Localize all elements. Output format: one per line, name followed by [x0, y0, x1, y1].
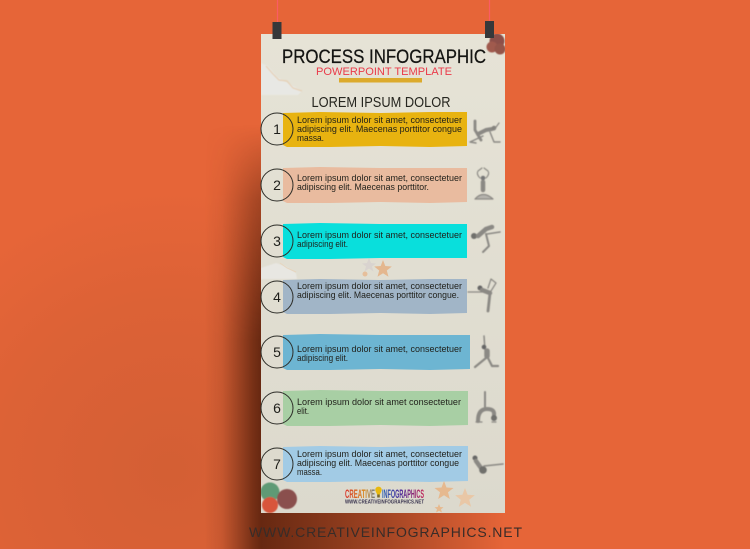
bar 3: [283, 223, 467, 259]
text: INFOGRAPHICS: [382, 487, 424, 501]
step 3: [261, 223, 500, 259]
decorative cloud top left: [261, 63, 302, 95]
step 2: [261, 167, 493, 203]
logo: CREATIVE: [345, 487, 375, 501]
text 7: Lorem ipsum dolor sit amet, consectetuer: [297, 449, 462, 460]
section heading: LOREM IPSUM DOLOR: [312, 95, 450, 111]
icon: yoga pose 3: [471, 227, 500, 252]
step 5: [261, 334, 498, 370]
text 3: Lorem ipsum dolor sit amet, consectetuer: [297, 230, 462, 241]
circle 3: 3: [273, 233, 281, 249]
bar 6: [283, 390, 468, 426]
text 2: adipiscing elit. Maecenas porttitor.: [297, 182, 429, 193]
text 4: Lorem ipsum dolor sit amet, consectetuer: [297, 281, 462, 292]
text 7: adipiscing elit. Maecenas porttitor congue: [297, 458, 459, 469]
text 4: [297, 281, 462, 301]
poster: [261, 34, 505, 513]
text 5: adipiscing elit.: [297, 353, 348, 364]
bar 1: [283, 112, 467, 147]
bar 7: [283, 446, 468, 482]
decorative leaves top right: [486, 34, 506, 54]
text 3: adipiscing elit.: [297, 239, 348, 250]
circle 4: 4: [273, 289, 281, 305]
circle 7: 7: [273, 456, 281, 472]
circle 5: [261, 336, 293, 368]
circle 5: 5: [273, 344, 281, 360]
circle 6: 6: [273, 400, 281, 416]
icon: yoga pose 2: [475, 168, 493, 199]
decorative stars middle: [362, 258, 392, 277]
icon: yoga pose 5: [475, 336, 498, 367]
text 1: [297, 115, 462, 144]
text 1: Lorem ipsum dolor sit amet, consectetuer: [297, 115, 462, 126]
circle 7: [261, 448, 293, 480]
text 7: [297, 449, 462, 478]
text 2: Lorem ipsum dolor sit amet, consectetuer: [297, 173, 462, 184]
bar 2: [283, 167, 467, 203]
text 4: adipiscing elit. Maecenas porttitor congue.: [297, 290, 459, 301]
underline bar: [339, 78, 422, 82]
text 5: Lorem ipsum dolor sit amet, consectetuer: [297, 344, 462, 355]
circle 3: [261, 225, 293, 257]
icon: yoga pose 4: [468, 279, 496, 311]
step 4: [261, 279, 496, 314]
circle 2: 2: [273, 177, 281, 193]
text 7: massa.: [297, 467, 322, 478]
subtitle: POWERPOINT TEMPLATE: [316, 66, 452, 78]
poster shadow: [0, 125, 505, 549]
logo: WWW.CREATIVEINFOGRAPHICS.NET: [345, 500, 424, 506]
hanging strings and clips: [272, 0, 494, 39]
circle 1: [261, 113, 293, 145]
text 1: adipiscing elit. Maecenas porttitor congue: [297, 124, 462, 135]
text 6: elit.: [297, 406, 309, 417]
text 6: Lorem ipsum dolor sit amet consectetuer: [297, 397, 461, 408]
step 1: [261, 112, 500, 147]
text 2: [297, 173, 462, 193]
bar 5: [283, 334, 470, 370]
text 1: massa.: [297, 133, 324, 144]
circle 6: [261, 392, 293, 424]
step 6: [261, 390, 497, 426]
decorative cloud middle: [261, 263, 297, 279]
text 3: [297, 230, 462, 250]
circle 4: [261, 281, 293, 313]
icon: yoga pose 7: [472, 456, 503, 474]
logo: [345, 487, 424, 506]
icon: yoga pose 6: [476, 392, 497, 422]
icon: yoga pose 1: [470, 121, 500, 143]
website footer: WWW.CREATIVEINFOGRAPHICS.NET: [249, 524, 522, 540]
circle 1: 1: [273, 121, 281, 137]
decorative leaves bottom left: [260, 482, 297, 513]
step 7: [261, 446, 503, 482]
decorative stars bottom right: [434, 481, 475, 512]
title: PROCESS INFOGRAPHIC: [282, 46, 486, 68]
text 6: [297, 397, 461, 417]
bar 4: [283, 279, 467, 314]
text 5: [297, 344, 462, 364]
circle 2: [261, 169, 293, 201]
